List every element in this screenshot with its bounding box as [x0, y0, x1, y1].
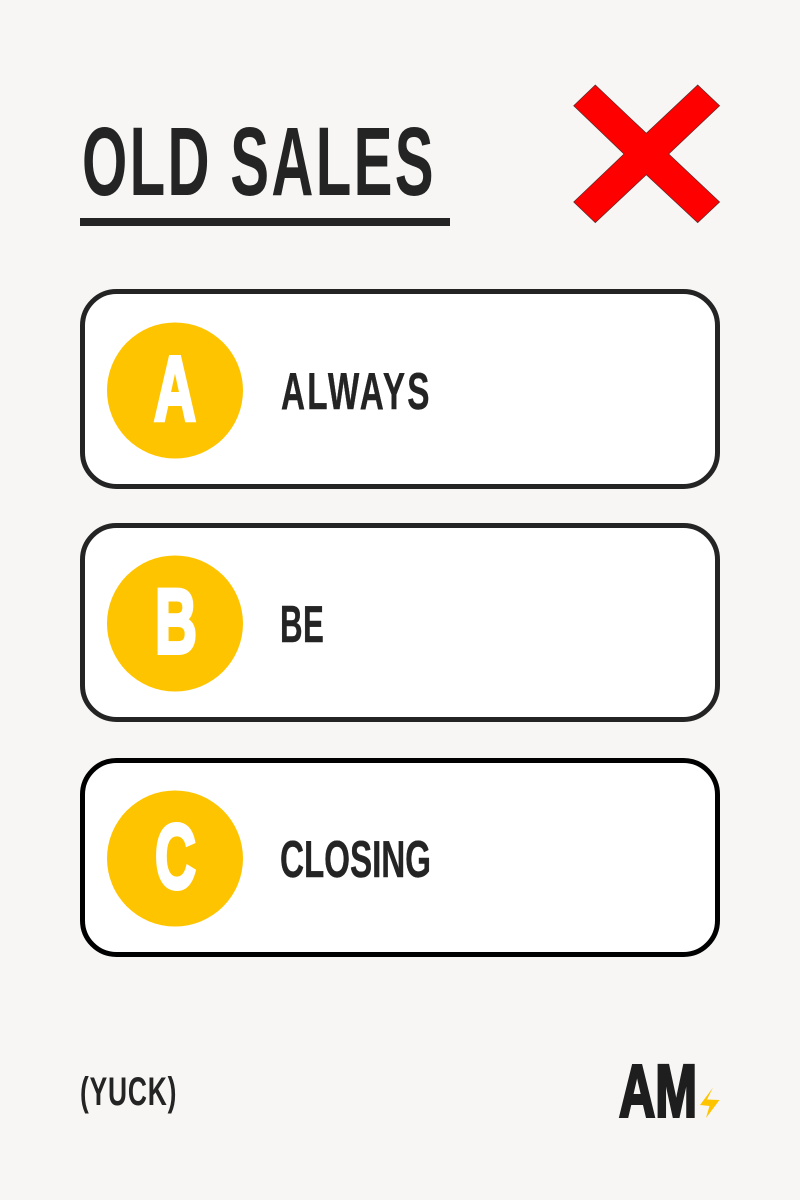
icon: letter B badge: B	[155, 571, 197, 673]
label: be: BE	[280, 596, 324, 654]
icon: letter C badge: C	[155, 806, 196, 908]
icon: red cross	[574, 85, 720, 223]
panel: B be	[82, 526, 718, 720]
logo: AM with bolt: AM	[619, 1050, 697, 1132]
footnote: yuck: (YUCK)	[80, 1070, 176, 1114]
panel: A always	[82, 292, 718, 486]
icon: letter C badge	[107, 790, 243, 926]
label: closing: CLOSING	[280, 831, 431, 889]
panel: C closing	[82, 760, 718, 954]
icon: letter B badge	[107, 556, 243, 692]
icon: letter A badge: A	[154, 338, 196, 440]
icon: letter A badge	[107, 322, 243, 458]
icon: lightning bolt	[700, 1088, 720, 1118]
title: old sales: OLD SALES	[82, 108, 434, 216]
label: always: ALWAYS	[281, 363, 429, 421]
